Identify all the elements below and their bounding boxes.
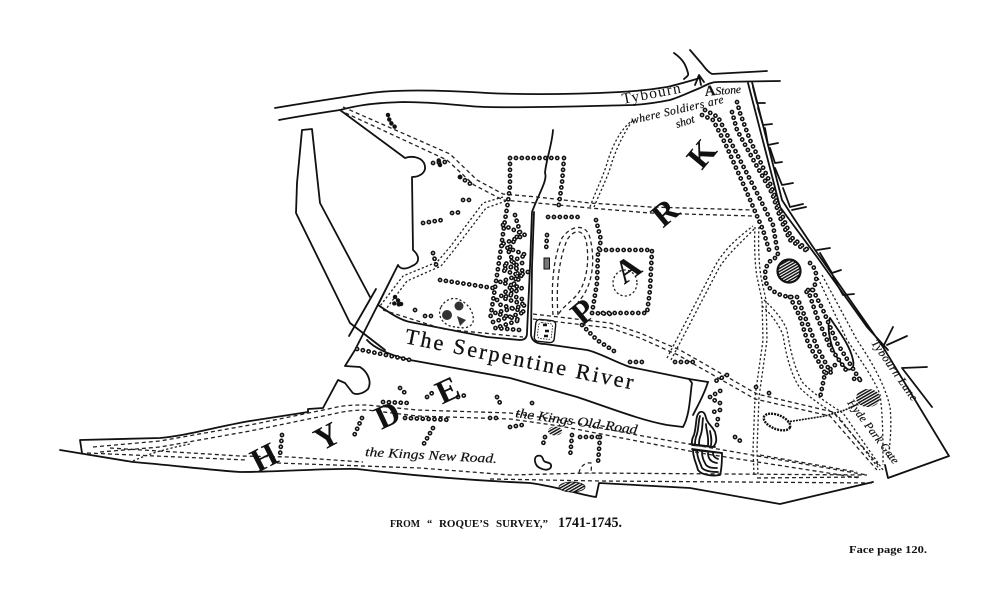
tree highlights <box>280 102 860 463</box>
loop path around oval <box>552 227 593 315</box>
label: Hyde Park Gate: Hyde Park Gate <box>844 397 901 467</box>
small hatched pond near King's Old Road <box>548 426 562 436</box>
label: A Stone: AStone <box>704 81 742 100</box>
label: shot: shot <box>674 113 697 131</box>
row south-east of the stream <box>582 325 727 383</box>
central hatched mound <box>778 260 800 282</box>
label: where Soldiers are: where Soldiers are <box>630 94 725 127</box>
path: diagonal to avenue <box>667 226 755 360</box>
page note: Face page 120. <box>849 544 927 556</box>
row toward grove <box>440 280 493 288</box>
caption: FROM <box>390 519 420 530</box>
path: north-south from avenue <box>753 227 767 475</box>
Tyburn road <box>275 78 780 120</box>
map outlines: roads and park boundary <box>60 50 949 504</box>
King's New Road dashed <box>87 448 873 483</box>
letter D: D <box>369 395 406 437</box>
avenue rows south <box>790 290 860 398</box>
river title: The Serpentine River <box>403 323 637 395</box>
letter Y: Y <box>308 416 346 459</box>
oblong bed <box>829 318 853 370</box>
letter P: P <box>564 292 603 333</box>
label: Tybourn Lane: Tybourn Lane <box>869 338 920 404</box>
letter K: K <box>680 133 725 176</box>
water channel <box>787 403 860 422</box>
small dashed circle <box>613 270 637 296</box>
King's Old Road dashed <box>93 405 867 478</box>
letter H: H <box>245 436 284 480</box>
avenue ring <box>765 258 816 297</box>
letter R: R <box>645 191 687 235</box>
path: along Park Lane <box>818 275 891 465</box>
path: diagonal to the south-west gate <box>380 197 506 309</box>
stream second bank and east river bank <box>531 212 708 382</box>
Tyburn gallows mark <box>695 75 704 85</box>
north square west side <box>490 158 563 320</box>
hatched Hyde Park Gate basin <box>856 389 880 407</box>
bridge over ponds <box>690 444 722 453</box>
path: north-west diagonal to avenue <box>339 107 753 216</box>
west boundary with bastions <box>340 110 425 348</box>
caption <box>390 515 622 531</box>
caption: SURVEY,” <box>496 519 548 530</box>
dashed paths <box>87 107 891 483</box>
north bank of the Serpentine and stream <box>378 130 553 340</box>
letter A: A <box>608 248 648 291</box>
curved pond outline <box>535 456 551 470</box>
hatched oval lake <box>761 410 793 434</box>
gate tick marks <box>883 327 932 407</box>
tree rows <box>280 102 860 463</box>
dashed arc <box>579 463 591 474</box>
path: east branch <box>762 300 883 470</box>
rows west <box>415 162 472 316</box>
label: Kings Old Road: the Kings Old-Road <box>515 405 639 437</box>
dense tree scatter <box>388 115 461 305</box>
dense grove strip <box>495 225 528 330</box>
hatched south pond <box>559 482 585 492</box>
path: north from oval to where soldiers are shot <box>590 120 633 207</box>
north square east side <box>548 158 583 217</box>
near the small ponds <box>542 435 600 463</box>
road crossing <box>349 289 376 336</box>
label: Tybourn: Tybourn <box>621 80 683 108</box>
Park Lane outer and inner lines <box>748 82 949 478</box>
building tree column <box>546 235 547 252</box>
building rectangle <box>544 258 550 269</box>
trees around ponds and river head <box>710 387 770 443</box>
south-west boundary with bastion <box>80 350 370 453</box>
grove enclosure <box>440 298 473 328</box>
Park Lane house ticks <box>753 87 854 295</box>
river head <box>693 382 708 415</box>
upper pond <box>692 412 716 447</box>
caption: 1741-1745. <box>558 515 622 531</box>
avenue rows <box>702 102 810 255</box>
south bank of the Serpentine <box>367 340 692 427</box>
north road branches <box>674 50 767 79</box>
caption: ROQUE’S <box>439 519 489 530</box>
lower roads connector <box>133 444 190 461</box>
enclosure by the stream <box>534 319 556 343</box>
row along south bank <box>357 349 410 360</box>
letter E: E <box>430 370 465 412</box>
Hyde road rows <box>280 418 500 455</box>
second square <box>592 220 652 314</box>
caption: “ <box>427 519 432 530</box>
loop around south paths <box>757 455 860 478</box>
south boundary <box>60 450 873 504</box>
detached western strip <box>296 129 385 350</box>
lower pond <box>693 450 722 475</box>
label: Kings New Road: the Kings New Road. <box>365 444 497 466</box>
path: north bank <box>383 310 880 470</box>
